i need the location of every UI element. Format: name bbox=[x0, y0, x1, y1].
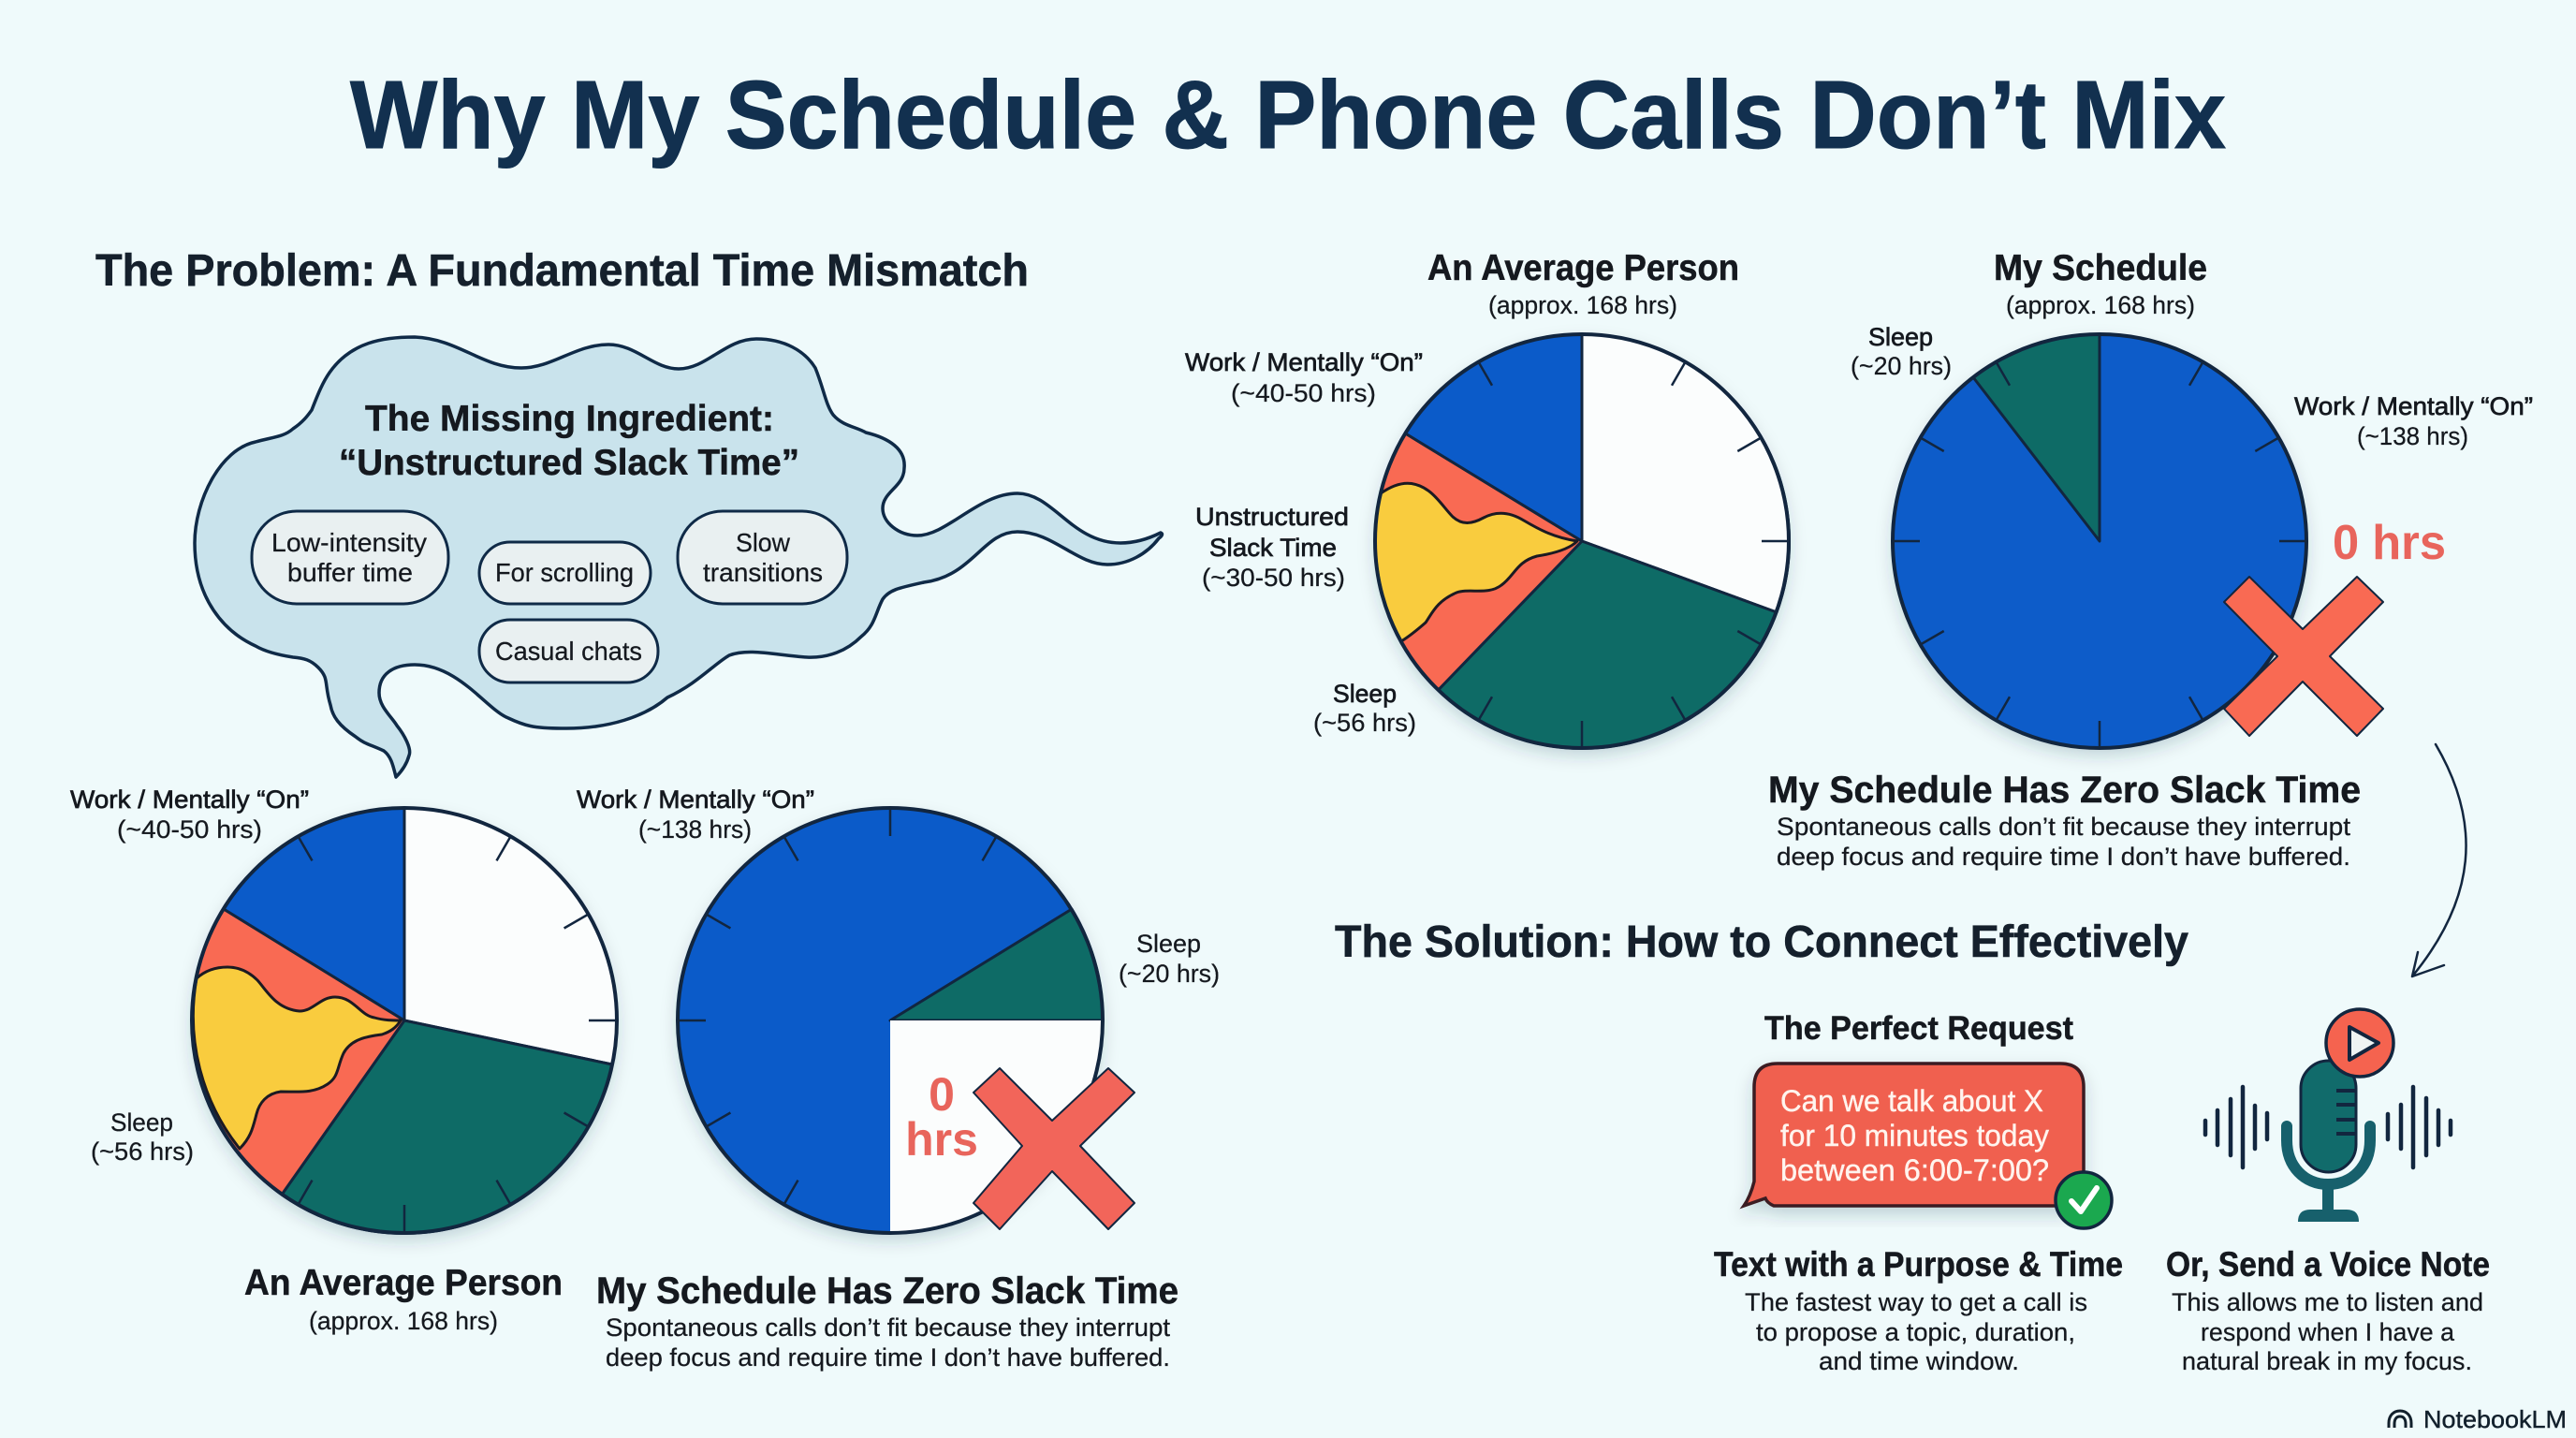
zero hours label, top: 0 hrs bbox=[2333, 516, 2446, 570]
pie chart: my schedule, top bbox=[1893, 334, 2306, 748]
mic cradle bbox=[2287, 1126, 2370, 1184]
pie heading: my schedule: My Schedule bbox=[1994, 248, 2207, 288]
caption: zero slack time, lower: My Schedule Has Zero Slack Time bbox=[596, 1270, 1178, 1312]
pill: for scrolling bbox=[479, 542, 651, 604]
panel: missing ingredient cloud bbox=[195, 337, 1162, 777]
text block: text with a purpose bbox=[1714, 1245, 2123, 1375]
pill: slow transitions: transitions bbox=[703, 558, 823, 587]
pill: low-intensity buffer time: Low-intensity bbox=[271, 528, 427, 557]
label: work lower middle: (~138 hrs) bbox=[638, 815, 752, 844]
icon: red x lower bbox=[973, 1068, 1134, 1229]
chat bubble with request: for 10 minutes today bbox=[1780, 1119, 2049, 1152]
text block: text with a purpose: Text with a Purpose & Time bbox=[1714, 1245, 2123, 1284]
mic body bbox=[2301, 1061, 2356, 1172]
pill: slow transitions bbox=[678, 511, 847, 604]
label: sleep top bbox=[1313, 680, 1416, 737]
arrow: to voice note bbox=[2412, 744, 2466, 976]
heading: the solution: The Solution: How to Connect Effectively bbox=[1335, 917, 2188, 967]
label: sleep lower left: Sleep bbox=[110, 1108, 173, 1137]
chat bubble with request bbox=[1744, 1064, 2084, 1206]
label: sleep top: (~56 hrs) bbox=[1313, 709, 1416, 737]
caption: zero slack time, top: deep focus and require time I don’t have buffered. bbox=[1777, 843, 2350, 871]
label: sleep top right: Sleep bbox=[1868, 323, 1933, 351]
text block: voice note: respond when I have a bbox=[2201, 1318, 2455, 1346]
pie heading: an average person bbox=[1427, 248, 1739, 319]
label: unstructured slack time: Slack Time bbox=[1209, 534, 1337, 562]
caption: an average person: An Average Person bbox=[244, 1263, 563, 1303]
text block: voice note: Or, Send a Voice Note bbox=[2166, 1245, 2490, 1284]
mic stand bbox=[2322, 1183, 2334, 1211]
caption: zero slack time, lower: deep focus and require time I don’t have buffered. bbox=[606, 1343, 1170, 1372]
zero hours label, lower bbox=[905, 1068, 978, 1166]
text block: voice note: This allows me to listen and bbox=[2172, 1288, 2483, 1316]
pill: slow transitions: Slow bbox=[736, 528, 791, 557]
label: unstructured slack time: (~30-50 hrs) bbox=[1202, 564, 1345, 592]
label: sleep top right: (~20 hrs) bbox=[1851, 352, 1952, 380]
icon: red x top bbox=[2224, 577, 2383, 736]
caption: an average person bbox=[244, 1263, 563, 1335]
label: work top right: (~138 hrs) bbox=[2357, 422, 2468, 450]
pill: casual chats bbox=[479, 620, 658, 682]
pill: low-intensity buffer time bbox=[252, 511, 448, 604]
label: work top bbox=[1185, 348, 1423, 407]
caption: zero slack time, lower: Spontaneous calls don’t fit because they interrupt bbox=[606, 1313, 1171, 1342]
cloud heading: The Missing Ingredient: bbox=[365, 399, 774, 439]
label: sleep top right bbox=[1851, 323, 1952, 380]
label: work lower left: (~40-50 hrs) bbox=[117, 815, 262, 844]
label: work top: (~40-50 hrs) bbox=[1231, 379, 1376, 407]
notebooklm logo: NotebookLM bbox=[2423, 1405, 2567, 1433]
label: work top right: Work / Mentally “On” bbox=[2294, 392, 2533, 420]
label: work top: Work / Mentally “On” bbox=[1185, 348, 1423, 376]
pie heading: an average person: An Average Person bbox=[1427, 248, 1739, 288]
pie chart: average person, lower left bbox=[192, 808, 617, 1233]
caption: zero slack time, lower bbox=[596, 1270, 1178, 1372]
label: unstructured slack time: Unstructured bbox=[1195, 503, 1349, 531]
title: Why My Schedule & Phone Calls Don’t Mix bbox=[350, 61, 2226, 169]
label: work lower middle bbox=[577, 785, 814, 844]
zero hours label, lower: 0 bbox=[929, 1068, 955, 1121]
label: sleep top: Sleep bbox=[1333, 680, 1397, 708]
pie heading: my schedule: (approx. 168 hrs) bbox=[2006, 291, 2195, 319]
pie chart: my schedule, lower bbox=[678, 808, 1103, 1233]
label: work lower left bbox=[70, 785, 309, 844]
pill: low-intensity buffer time: buffer time bbox=[287, 558, 413, 587]
caption: zero slack time, top: My Schedule Has Zero Slack Time bbox=[1768, 770, 2361, 811]
heading: the problem: The Problem: A Fundamental Time Mismatch bbox=[95, 246, 1029, 296]
label: sleep lower middle: (~20 hrs) bbox=[1119, 960, 1220, 988]
play button bbox=[2326, 1009, 2393, 1077]
caption: an average person: (approx. 168 hrs) bbox=[309, 1307, 498, 1335]
pill: for scrolling: For scrolling bbox=[495, 558, 634, 587]
caption: zero slack time, top: Spontaneous calls don’t fit because they interrupt bbox=[1777, 813, 2351, 841]
pie heading: my schedule bbox=[1994, 248, 2207, 319]
caption: zero slack time, top bbox=[1768, 770, 2361, 871]
text block: voice note: natural break in my focus. bbox=[2182, 1347, 2472, 1375]
icon: microphone with sound waves bbox=[2205, 1009, 2451, 1222]
text block: text with a purpose: to propose a topic, duration, bbox=[1756, 1318, 2075, 1346]
text block: text with a purpose: and time window. bbox=[1819, 1347, 2019, 1375]
chat bubble with request: Can we talk about X bbox=[1780, 1084, 2043, 1118]
label: unstructured slack time bbox=[1195, 503, 1349, 592]
label: sleep lower middle: Sleep bbox=[1136, 930, 1201, 958]
pill: casual chats: Casual chats bbox=[495, 637, 642, 666]
heading: the perfect request: The Perfect Request bbox=[1764, 1010, 2073, 1047]
zero hours label, lower: hrs bbox=[905, 1113, 978, 1166]
icon: green check bbox=[2056, 1172, 2112, 1228]
pie chart: average person, top bbox=[1375, 334, 1789, 748]
text block: voice note bbox=[2166, 1245, 2490, 1375]
label: work lower middle: Work / Mentally “On” bbox=[577, 785, 814, 814]
cloud shape bbox=[195, 337, 1162, 777]
label: work lower left: Work / Mentally “On” bbox=[70, 785, 309, 814]
chat bubble with request: between 6:00-7:00? bbox=[1780, 1153, 2049, 1187]
label: sleep lower middle bbox=[1119, 930, 1220, 988]
label: sleep lower left: (~56 hrs) bbox=[91, 1137, 194, 1166]
pie heading: an average person: (approx. 168 hrs) bbox=[1488, 291, 1677, 319]
label: work top right bbox=[2294, 392, 2533, 450]
cloud heading: “Unstructured Slack Time” bbox=[339, 443, 799, 483]
label: sleep lower left bbox=[91, 1108, 194, 1166]
sound waves bbox=[2205, 1087, 2451, 1167]
text block: text with a purpose: The fastest way to get a call is bbox=[1745, 1288, 2087, 1316]
cloud heading bbox=[339, 399, 799, 483]
